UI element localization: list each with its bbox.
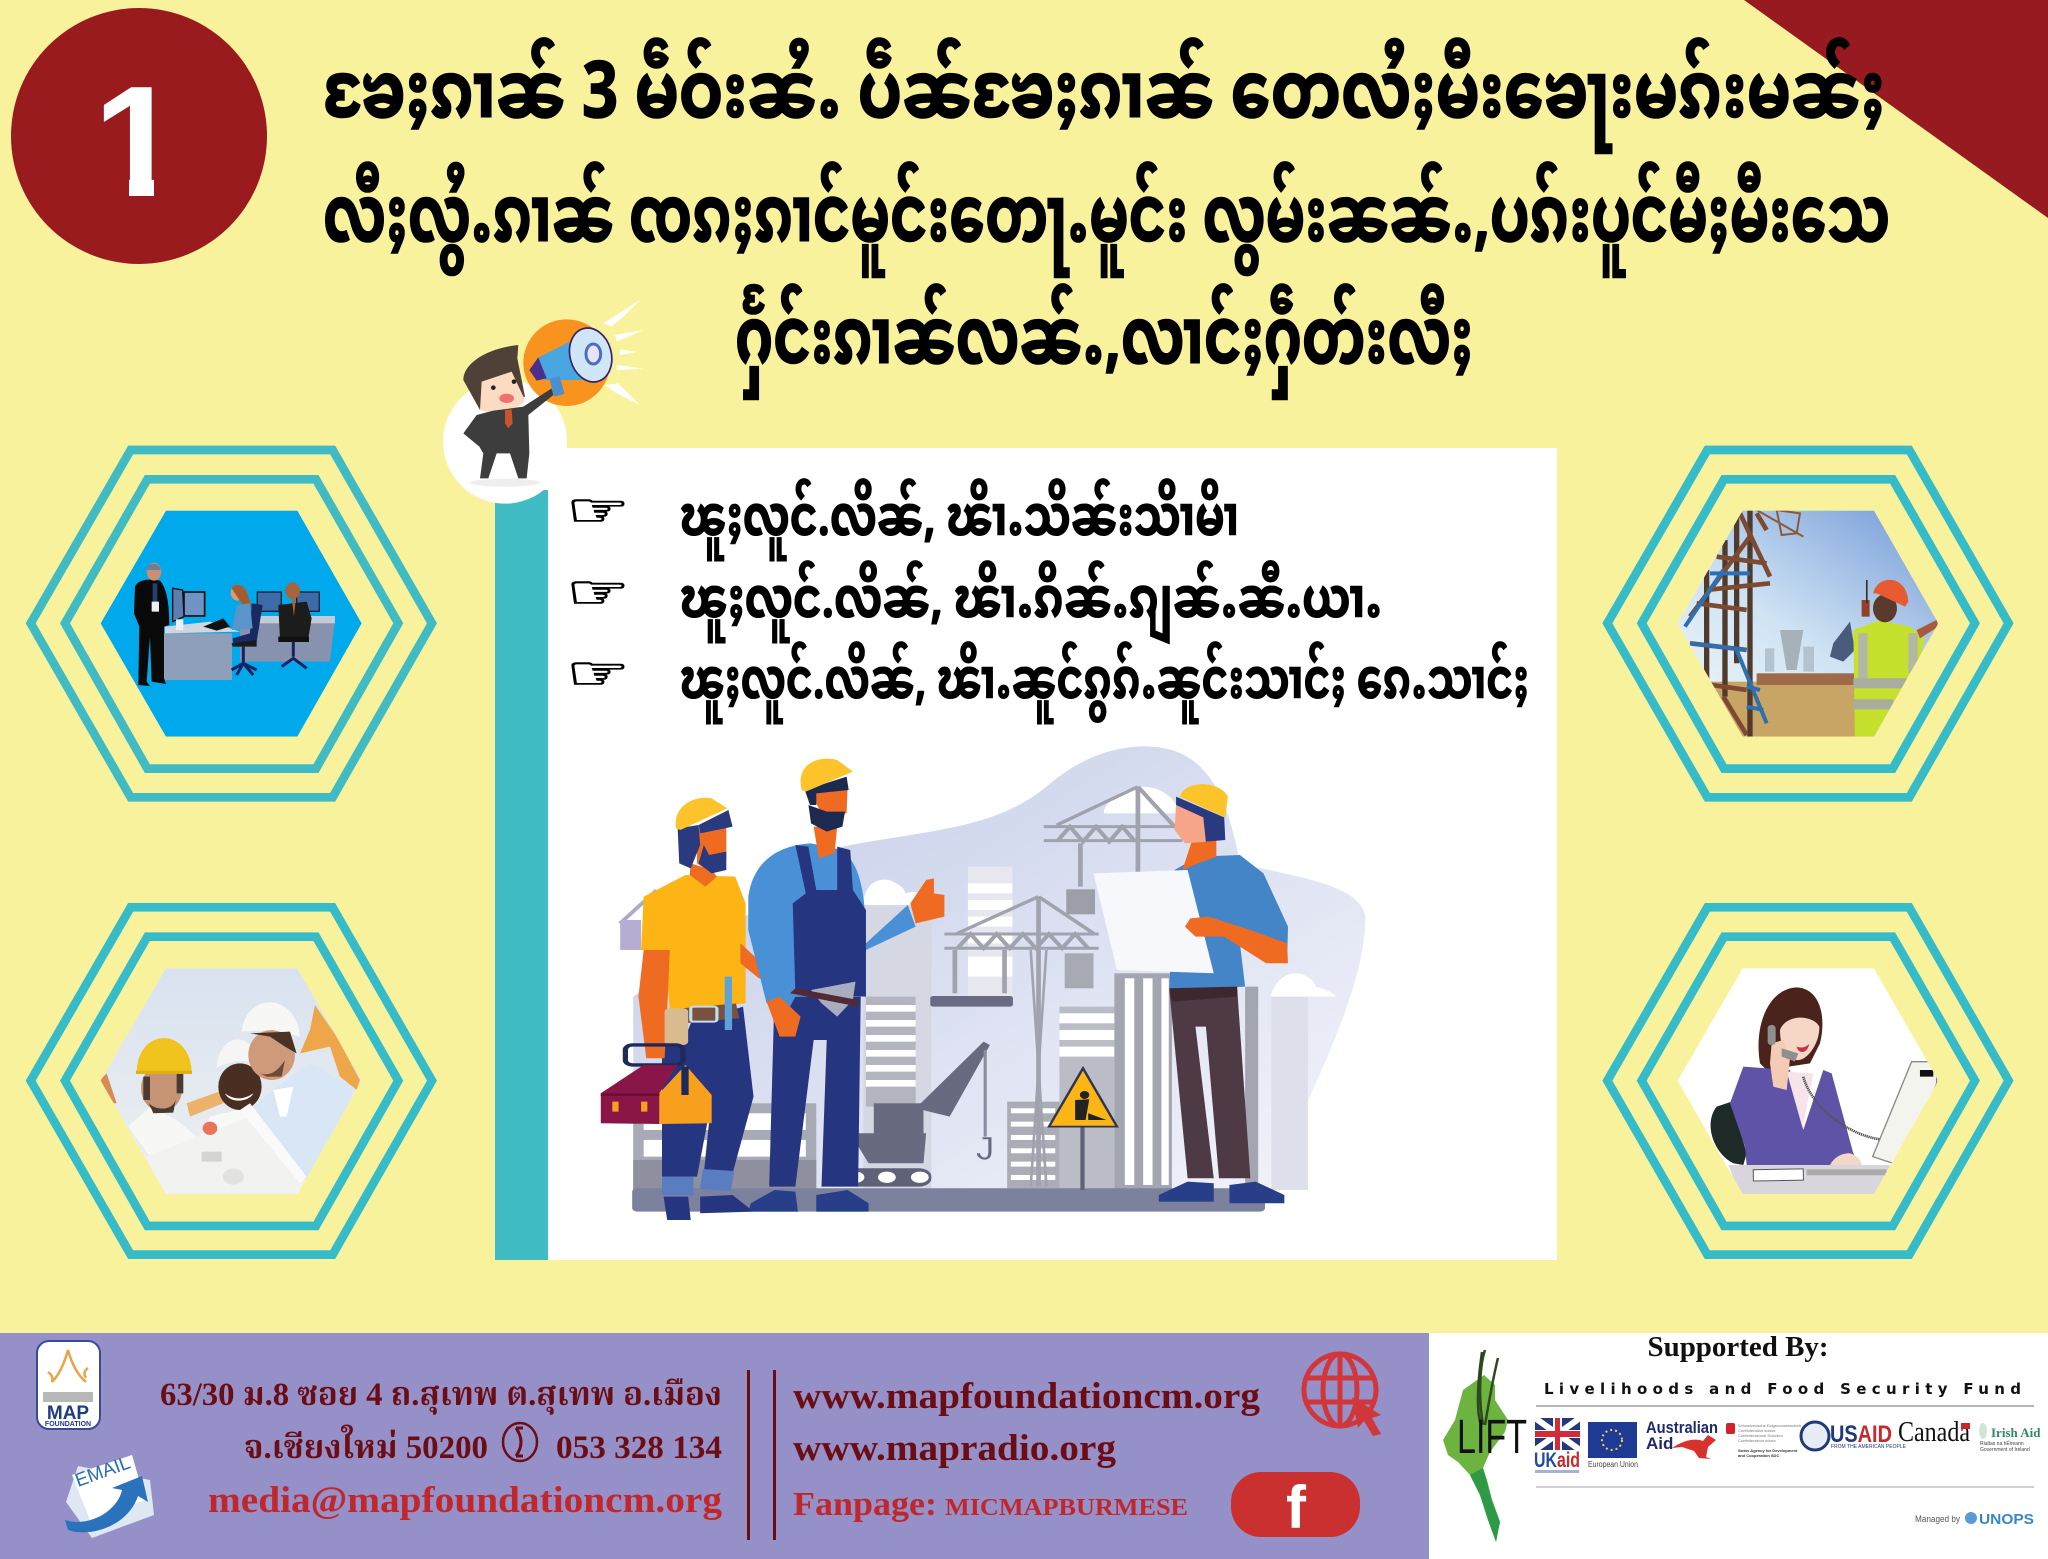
icon: pointing hand bullets: ☞: [566, 566, 630, 620]
logo: UK aid: UKaid: [1534, 1449, 1580, 1472]
ground: [632, 1188, 1265, 1212]
panel: footer contact band: [0, 1333, 1429, 1559]
logo: Swiss agency: Schweizerische Eidgenossenschaft: [1738, 1423, 1802, 1428]
bullet text: ၽူႈလူင်.လိၼ်, ၽိၢႉသိၼ်းသိၢမိၢ: [680, 462, 1239, 584]
photo: office staff at desks: [100, 510, 362, 737]
address block: media@mapfoundationcm.org: [208, 1480, 723, 1521]
websites block: [793, 1376, 1261, 1523]
worker left: yellow shirt: [601, 798, 827, 1220]
toolbox: [625, 1045, 683, 1065]
bullet text: [680, 462, 1529, 747]
icon: email: EMAIL: [73, 1452, 133, 1492]
websites block: www.mapfoundationcm.org: [793, 1376, 1261, 1417]
websites block: MICMAPBURMESE: [945, 1495, 1188, 1521]
title: ႁႅင်းၵၢၼ်လၼ်ႉ,လၢင်ႈႁဵတ်းလီႈ: [735, 261, 1473, 431]
logo: Swiss agency: [1726, 1423, 1802, 1458]
logo: USAID: FROM THE AMERICAN PEOPLE: [1831, 1444, 1907, 1450]
logo: Australian Aid: Australian: [1646, 1418, 1718, 1437]
logo: UNOPS: Managed by: [1915, 1514, 1960, 1524]
logo: Swiss agency: and Cooperation SDC: [1738, 1453, 1779, 1458]
address block: 053 328 134: [556, 1430, 722, 1466]
logo: LIFT map: LIFT: [1457, 1411, 1527, 1464]
icon: globe with cursor: [1304, 1354, 1381, 1436]
logo: UNOPS: UNOPS: [1979, 1511, 2034, 1528]
worker right: blueprint: [1093, 784, 1288, 1203]
logo: Swiss agency: Swiss Agency for Development: [1738, 1448, 1798, 1453]
logo: USAID: USAID: [1830, 1421, 1892, 1448]
panel: supporters: [1429, 1332, 2048, 1559]
corner triangle: [1744, 0, 2048, 218]
address block: 63/30 ม.8 ซอย 4 ถ.สุเทพ ต.สุเทพ อ.เมือง: [160, 1377, 722, 1416]
websites block: Fanpage:: [793, 1486, 937, 1523]
logo: UK aid: [1534, 1418, 1580, 1473]
logo: Swiss agency: Confédération suisse: [1738, 1428, 1776, 1433]
title: [323, 15, 1890, 431]
worker middle: overalls: [748, 759, 944, 1212]
buildings: [633, 787, 1337, 1190]
bullet text: ၽူႈလူင်.လိၼ်, ၽိၢႉၼူင်ၵွၵ်ႉၼူင်းသၢင်ႈ ၵေႉသၢင်ႈ: [680, 625, 1529, 747]
warning sign: [1049, 1068, 1117, 1190]
hexagon: office team: [31, 450, 432, 797]
number badge: 1: [93, 54, 181, 230]
number badge: [11, 8, 267, 264]
heading: Supported By:: [1648, 1332, 1828, 1363]
icon: MAP Foundation logo: [37, 1341, 100, 1429]
list: three bullet lines: [566, 462, 1529, 747]
illustration: construction workers and city: [601, 746, 1365, 1220]
logo: Swiss agency: Confederazione Svizzera: [1738, 1433, 1783, 1438]
mobile crane: [845, 1042, 990, 1187]
icon: pointing hand bullets: ☞: [566, 647, 630, 701]
icon: man with megaphone: [443, 300, 643, 504]
icon: MAP Foundation logo: FOUNDATION: [45, 1421, 91, 1428]
illustration: woman on telephone: [1673, 963, 1947, 1200]
logo: Irish Aid: Rialtas na hÉireann: [1980, 1440, 2024, 1447]
hexagon: receptionist on phone: [1607, 907, 2009, 1255]
hexagon: construction site: [1607, 450, 2009, 797]
logo: Irish Aid: Government of Ireland: [1980, 1447, 2030, 1453]
bullet text: ၽူႈလူင်.လိၼ်, ၽိၢႉၵိၼ်ႉၵျၼ်ႉၼီႉယၢႉ: [680, 544, 1382, 666]
photo: three engineers: [100, 968, 362, 1194]
logo: Irish Aid: Irish Aid: [1991, 1425, 2041, 1440]
icon: facebook button: f: [1286, 1474, 1307, 1541]
logo: Swiss agency: Confederaziun svizra: [1738, 1438, 1776, 1443]
cranes: [620, 787, 1182, 1187]
hexagon: engineers with blueprint: [31, 907, 432, 1255]
icon: facebook button: [1231, 1472, 1360, 1541]
logo: Canada: Canada: [1898, 1416, 1970, 1448]
logo: European Union: [1588, 1422, 1638, 1469]
logo: Australian Aid: Aid: [1646, 1434, 1673, 1453]
logo: UNOPS: [1915, 1511, 2034, 1528]
icon: pointing hand bullets: ☞: [566, 484, 630, 538]
address block: จ.เชียงใหม่ 50200: [244, 1423, 488, 1466]
websites block: www.mapradio.org: [793, 1428, 1117, 1469]
fund name: Livelihoods and Food Security Fund: [1544, 1380, 2021, 1398]
logo: Australian Aid: [1646, 1418, 1718, 1459]
address block: [160, 1377, 723, 1521]
logo: USAID: [1801, 1421, 1907, 1450]
icon: pointing hand bullets: [566, 484, 630, 701]
icon: MAP Foundation logo: MAP: [47, 1403, 89, 1424]
logo: European Union: European Union: [1588, 1460, 1638, 1469]
logo: LIFT map: [1443, 1350, 1527, 1542]
logo: Irish Aid: [1979, 1423, 2041, 1453]
panel: content card: [495, 448, 1557, 1260]
icon: email: [65, 1452, 154, 1538]
photo: engineer with radio: [1673, 507, 1943, 740]
